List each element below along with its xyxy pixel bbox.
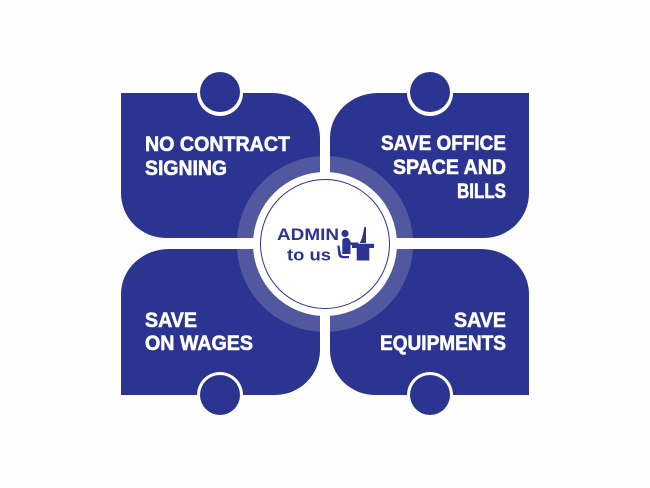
node circle: bottom right (407, 372, 453, 415)
node circle: top right (407, 72, 453, 116)
center circle (253, 172, 397, 316)
heading: no contract signing: NO CONTRACT (145, 133, 290, 156)
heading: save on wages: SAVE (145, 309, 197, 332)
heading: save on wages (145, 309, 253, 355)
heading: save on wages: ON WAGES (145, 332, 253, 355)
icon: person at desk (337, 227, 374, 260)
heading: save office space and bills: BILLS (457, 180, 506, 203)
node circle: top left (197, 72, 243, 116)
panel: save office space and bills (330, 72, 529, 238)
center label: ADMIN (277, 225, 339, 244)
center label (277, 225, 339, 264)
heading: save office space and bills (381, 132, 506, 203)
node circle: bottom left (197, 372, 243, 415)
heading: save equipments: SAVE (454, 309, 506, 332)
heading: no contract signing: SIGNING (145, 157, 227, 180)
panel: no contract signing (121, 72, 320, 238)
panel: save equipments (330, 249, 529, 415)
heading: save equipments (380, 309, 506, 355)
heading: save office space and bills: SPACE AND (393, 156, 506, 179)
heading: no contract signing (145, 133, 290, 180)
heading: save office space and bills: SAVE OFFICE (381, 132, 506, 155)
panel: save on wages (121, 249, 320, 415)
translucent ring (237, 156, 413, 332)
center label: to us (287, 246, 331, 264)
heading: save equipments: EQUIPMENTS (380, 332, 506, 355)
